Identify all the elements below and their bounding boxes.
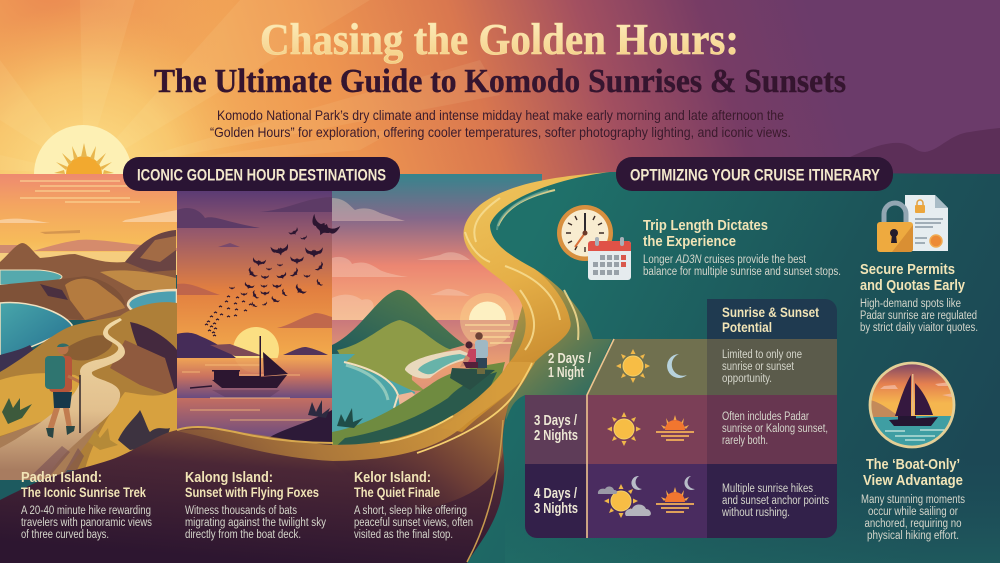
text: trip length bbox=[643, 217, 841, 278]
bay: right bbox=[128, 290, 177, 313]
row: 4 days: 3 Nights bbox=[534, 501, 578, 517]
hiker bbox=[45, 343, 80, 438]
table header: Potential bbox=[722, 319, 772, 335]
golden ribbon road bbox=[177, 172, 610, 562]
dark lower-left wave bbox=[0, 355, 533, 563]
island mountain bbox=[332, 290, 465, 354]
intro text: Komodo National Park’s dry climate and intense midday heat make early morning and late afternoon the bbox=[217, 107, 784, 123]
text: Padar Island: of three curved bays. bbox=[21, 529, 109, 541]
row: 4 days: without rushing. bbox=[721, 507, 790, 519]
text: Kelor Island: The Quiet Finale bbox=[354, 484, 440, 500]
section pill: destinations bbox=[123, 157, 400, 191]
text: Kelor Island: Kelor Island: bbox=[354, 469, 431, 486]
text: trip length: balance for multiple sunrise and sunset stops. bbox=[643, 266, 841, 278]
row: 4 days bbox=[534, 476, 829, 519]
text: trip length: Trip Length Dictates bbox=[643, 217, 768, 234]
section pill: destinations: ICONIC GOLDEN HOUR DESTINATIONS bbox=[137, 166, 386, 184]
intro text bbox=[210, 107, 791, 140]
comparison table bbox=[525, 299, 837, 538]
bay bbox=[332, 354, 415, 440]
table header: Sunrise & Sunset bbox=[722, 304, 819, 320]
winding trail bbox=[0, 318, 125, 480]
ribbon lower brown fade bbox=[333, 355, 533, 510]
row: 4 days: and sunset anchor points bbox=[722, 495, 829, 507]
golden hills bbox=[0, 302, 177, 470]
distant purple hill bbox=[840, 128, 1000, 176]
icon: lock and permit bbox=[877, 195, 948, 252]
row: 2 days bbox=[548, 349, 802, 385]
text: Kalong Island: directly from the boat deck. bbox=[185, 529, 301, 541]
row: 3 days bbox=[534, 411, 828, 447]
text: permits: and Quotas Early bbox=[860, 277, 966, 294]
large bat overlapping panels bbox=[307, 214, 340, 241]
foreground hill bbox=[332, 362, 505, 450]
title bbox=[154, 15, 846, 100]
row: 2 days: 2 Days / bbox=[548, 351, 591, 367]
text: permits: by strict daily viaitor quotes. bbox=[860, 322, 978, 334]
text: trip length: Longer AD3N cruises provide the best bbox=[643, 254, 807, 266]
icon: sailboat badge bbox=[868, 362, 958, 448]
icon: clock and calendar bbox=[557, 205, 631, 280]
text: Kelor Island bbox=[354, 469, 473, 541]
table header bbox=[722, 304, 819, 335]
row: 4 days: Multiple sunrise hikes bbox=[722, 483, 813, 495]
intro text: “Golden Hours” for exploration, offering cooler temperatures, softer photography lighting, and iconic views. bbox=[210, 124, 791, 140]
row: 2 days: sunrise or sunset bbox=[722, 361, 795, 373]
text: boat-only advantage: anchored, requiring no bbox=[864, 518, 962, 530]
boat bbox=[190, 336, 288, 397]
row: 3 days: sunrise or Kalong sunset, bbox=[722, 423, 828, 435]
row: 4 days: 4 Days / bbox=[534, 486, 577, 502]
text: boat-only advantage: Many stunning moments bbox=[861, 494, 965, 506]
text: Padar Island bbox=[21, 469, 152, 541]
title: Chasing the Golden Hours: bbox=[260, 15, 739, 64]
row: 3 days: 3 Days / bbox=[534, 413, 577, 429]
row: 3 days: 2 Nights bbox=[534, 428, 578, 444]
row: 2 days: Limited to only one bbox=[722, 349, 802, 361]
text: Kalong Island: Sunset with Flying Foxes bbox=[185, 484, 319, 500]
text: boat-only advantage: View Advantage bbox=[863, 472, 963, 489]
text: Padar Island: travelers with panoramic views bbox=[21, 517, 152, 529]
text: trip length: the Experience bbox=[643, 233, 736, 250]
couple bbox=[460, 332, 488, 374]
title: The Ultimate Guide to Komodo Sunrises & Sunsets bbox=[154, 63, 846, 100]
panel: Padar Island scene bbox=[0, 174, 177, 480]
text: permits: Secure Permits bbox=[860, 261, 955, 278]
text: Kelor Island: A short, sleep hike offering bbox=[354, 505, 467, 517]
text: boat-only advantage bbox=[861, 456, 965, 542]
icon: rising sun bbox=[34, 125, 132, 174]
text: Padar Island: The Iconic Sunrise Trek bbox=[21, 484, 146, 500]
row: 3 days: Often includes Padar bbox=[722, 411, 809, 423]
section pill: itinerary bbox=[616, 157, 893, 191]
teal right background bbox=[450, 172, 1000, 563]
text: Kelor Island: peaceful sunset views, often bbox=[354, 517, 473, 529]
text: Padar Island: Padar Island: bbox=[21, 469, 102, 486]
panel: Kelor Island scene bbox=[332, 174, 542, 450]
text: permits: High-demand spots like bbox=[860, 298, 961, 310]
text: boat-only advantage: The ‘Boat-Only’ bbox=[866, 456, 960, 473]
row: 2 days: opportunity. bbox=[722, 373, 772, 385]
text: Kalong Island: migrating against the twilight sky bbox=[185, 517, 326, 529]
text: permits bbox=[860, 261, 978, 334]
text: Kalong Island: Witness thousands of bats bbox=[185, 505, 297, 517]
row: 2 days: 1 Night bbox=[548, 365, 584, 381]
text: boat-only advantage: physical hiking effort. bbox=[867, 530, 959, 542]
panel: Kalong Island scene bbox=[177, 191, 332, 445]
flying foxes bbox=[205, 227, 326, 336]
text: Padar Island: A 20-40 minute hike rewarding bbox=[21, 505, 151, 517]
text: Kalong Island bbox=[185, 469, 326, 541]
text: permits: Padar sunrise are regulated bbox=[860, 310, 977, 322]
ribbon olive shadow bbox=[506, 268, 612, 420]
bay: main bbox=[0, 303, 72, 358]
text: Kalong Island: Kalong Island: bbox=[185, 469, 273, 486]
sky background bbox=[0, 0, 1000, 200]
row: 3 days: rarely both. bbox=[722, 435, 768, 447]
section pill: itinerary: OPTIMIZING YOUR CRUISE ITINERARY bbox=[630, 166, 880, 184]
bay: upper bbox=[0, 270, 62, 285]
text: Kelor Island: visited as the final stop. bbox=[354, 529, 453, 541]
text: boat-only advantage: occur while sailing or bbox=[868, 506, 958, 518]
